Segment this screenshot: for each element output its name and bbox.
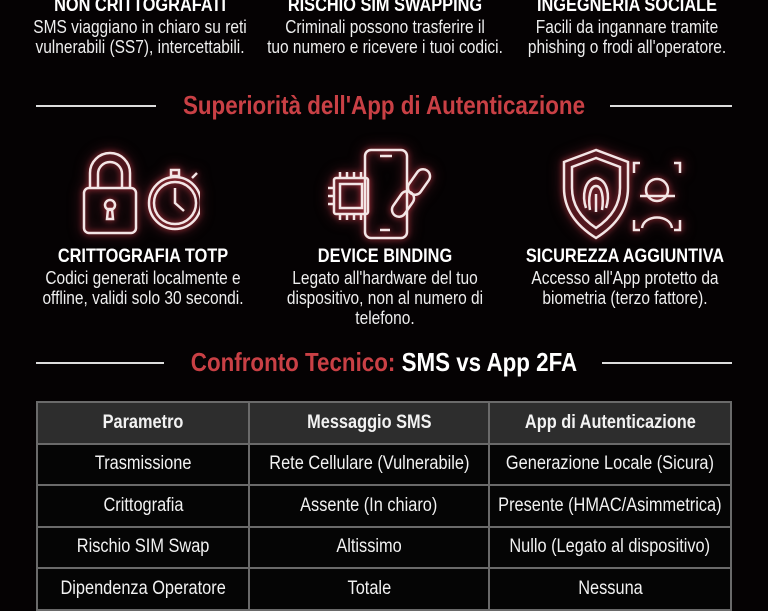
table: comparison xyxy=(36,401,732,611)
table: comparison: Generazione Locale (Sicura) xyxy=(506,453,714,474)
panel: app advantages xyxy=(42,246,724,328)
table: comparison: Trasmissione xyxy=(95,453,191,474)
table: comparison: Nessuna xyxy=(578,578,642,599)
col: sim swapping: tuo numero e ricevere i tuoi codici. xyxy=(267,37,503,57)
col: device binding: telefono. xyxy=(355,308,415,328)
col: sim swapping xyxy=(267,0,503,57)
col: totp: offline, validi solo 30 secondi. xyxy=(42,288,244,308)
col: ingegneria sociale xyxy=(528,0,726,57)
col: device binding: Legato all'hardware del tuo xyxy=(292,268,478,288)
table: comparison: Rete Cellulare (Vulnerabile) xyxy=(269,453,469,474)
col: ingegneria sociale: phishing o frodi all'operatore. xyxy=(528,37,726,57)
icon: lock and stopwatch xyxy=(75,144,207,242)
heading: superiorità: Superiorità dell'App di Autenticazione xyxy=(183,90,585,120)
col: sicurezza aggiuntiva: SICUREZZA AGGIUNTIVA xyxy=(526,246,724,267)
col: sicurezza aggiuntiva: biometria (terzo fattore). xyxy=(542,288,708,308)
table: comparison: Totale xyxy=(347,578,391,599)
icon: chip phone link xyxy=(322,140,438,247)
col: non crittografati: vulnerabili (SS7), intercettabili. xyxy=(35,37,245,57)
table: comparison: Nullo (Legato al dispositivo) xyxy=(510,536,710,557)
col: sim swapping: Criminali possono trasferire il xyxy=(285,17,485,37)
table: comparison: Dipendenza Operatore xyxy=(60,578,226,599)
col: ingegneria sociale: Facili da ingannare tramite xyxy=(536,17,718,37)
col: device binding: dispositivo, non al numero di xyxy=(287,288,483,308)
heading: confronto tecnico: Confronto Tecnico: SMS vs App 2FA xyxy=(191,347,577,377)
col: totp: Codici generati localmente e xyxy=(45,268,241,288)
col: totp: CRITTOGRAFIA TOTP xyxy=(58,246,228,267)
table: comparison: Parametro xyxy=(103,412,183,433)
table: comparison: Messaggio SMS xyxy=(307,412,431,433)
table: comparison: Crittografia xyxy=(103,495,183,516)
col: sicurezza aggiuntiva xyxy=(526,246,724,308)
table: comparison: Rischio SIM Swap xyxy=(77,536,209,557)
table: comparison: App di Autenticazione xyxy=(525,412,695,433)
col: sicurezza aggiuntiva: Accesso all'App protetto da xyxy=(531,268,719,288)
table: comparison: Altissimo xyxy=(336,536,402,557)
panel: SMS weaknesses xyxy=(33,0,726,57)
col: non crittografati: SMS viaggiano in chiaro su reti xyxy=(33,17,247,37)
table: comparison: Presente (HMAC/Asimmetrica) xyxy=(498,495,722,516)
col: totp xyxy=(42,246,244,308)
icon: shield fingerprint face xyxy=(555,142,688,245)
col: device binding xyxy=(287,246,483,328)
col: device binding: DEVICE BINDING xyxy=(318,246,452,267)
col: non crittografati xyxy=(33,0,247,57)
table: comparison: Assente (In chiaro) xyxy=(300,495,438,516)
